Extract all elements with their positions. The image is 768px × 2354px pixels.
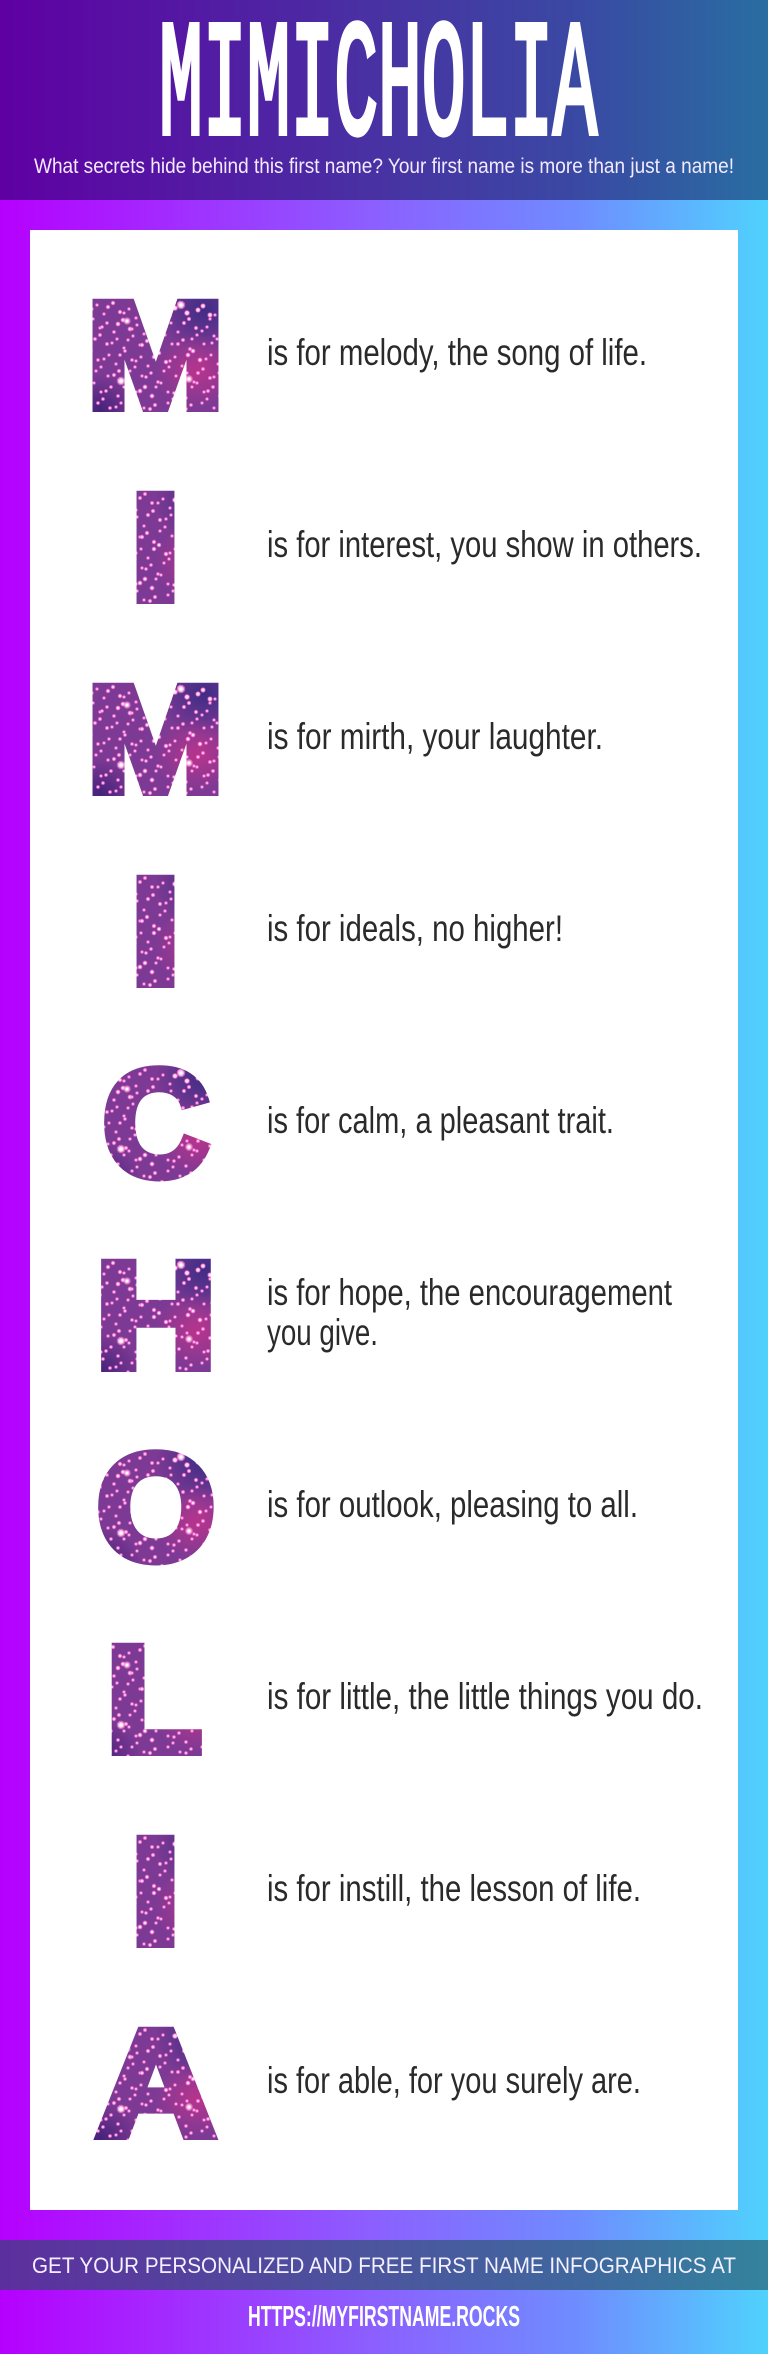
row: M mirth: is for mirth, your laughter.: [267, 716, 603, 757]
row: M melody: [87, 271, 647, 439]
row: I ideals: [130, 847, 563, 1015]
row: M mirth: [87, 655, 603, 823]
footer call to action: GET YOUR PERSONALIZED AND FREE FIRST NAME INFOGRAPHICS AT: [32, 2253, 736, 2278]
row: I instill: [130, 1807, 641, 1975]
row: A able: is for able, for you surely are.: [267, 2060, 641, 2101]
row: H hope: [96, 1231, 673, 1399]
row: H hope: H: [96, 1231, 216, 1399]
row: A able: A: [97, 1999, 215, 2167]
row: A able: [97, 1999, 641, 2167]
row: M melody: is for melody, the song of life.: [267, 332, 647, 373]
row: M melody: M: [87, 271, 224, 439]
row: O outlook: O: [97, 1423, 215, 1591]
row: C calm: is for calm, a pleasant trait.: [267, 1100, 614, 1141]
row: C calm: [103, 1039, 614, 1207]
header band: [0, 0, 768, 200]
title: MIMICHOLIA: [159, 0, 597, 183]
row: L little: [106, 1615, 703, 1783]
row: L little: L: [106, 1615, 202, 1783]
white content panel: [30, 230, 738, 2210]
row: O outlook: is for outlook, pleasing to all.: [267, 1484, 638, 1525]
row: I ideals: I: [130, 847, 180, 1015]
footer band: [0, 2240, 768, 2290]
row: I instill: is for instill, the lesson of life.: [267, 1868, 641, 1909]
row: O outlook: [97, 1423, 638, 1591]
row: M mirth: M: [87, 655, 224, 823]
row: H hope: is for hope, the encouragement: [267, 1272, 673, 1313]
row: I instill: I: [130, 1807, 180, 1975]
row: H hope: you give.: [267, 1312, 378, 1353]
row: I interest: [130, 463, 702, 631]
footer url: HTTPS://MYFIRSTNAME.ROCKS: [248, 2301, 520, 2333]
row: I interest: I: [130, 463, 180, 631]
row: C calm: C: [103, 1039, 209, 1207]
row: I ideals: is for ideals, no higher!: [267, 908, 563, 949]
